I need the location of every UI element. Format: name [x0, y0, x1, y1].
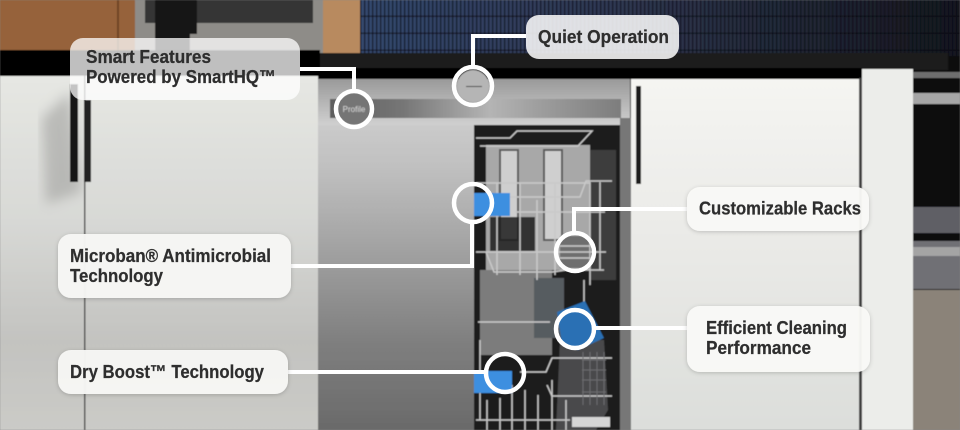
control bar: [330, 99, 621, 118]
dishwasher interior: [474, 125, 620, 430]
callout: microban: Technology: [70, 265, 164, 286]
handle shadow: [42, 92, 82, 204]
oven at right: [913, 72, 960, 290]
callout: efficient cleaning: Performance: [706, 337, 811, 358]
hotspot: efficient cleaning: [556, 310, 594, 348]
callout: smart features: Powered by SmartHQ™: [86, 66, 276, 87]
hotspot: microban: [454, 184, 492, 222]
line: customizable racks: [574, 209, 687, 232]
right side panel: [862, 69, 913, 430]
hotspot circles: [336, 67, 594, 392]
left cabinet handle: [70, 84, 91, 182]
wood cabinet left: [0, 0, 135, 52]
right side seam: [859, 78, 862, 430]
line: efficient cleaning: [595, 326, 687, 330]
racks: [476, 131, 612, 430]
hotspot: smart features: [336, 91, 372, 127]
blue part: wash module: [557, 301, 604, 350]
callout: quiet operation: Quiet Operation: [538, 26, 669, 47]
hotspot: dry boost: [486, 354, 524, 392]
floor: [911, 290, 960, 430]
quiet icon: [457, 70, 489, 102]
cabinet seam: [84, 76, 86, 430]
dishwasher door steel: [318, 79, 475, 430]
callout: customizable racks: [687, 187, 869, 231]
blue part: Microban dispenser: [474, 193, 510, 216]
callout: efficient cleaning: Efficient Cleaning: [706, 317, 847, 338]
connector lines: [288, 36, 687, 372]
callout: microban: Microban® Antimicrobial: [70, 245, 271, 266]
door frame right edge: [620, 118, 631, 430]
line: quiet operation: [473, 36, 526, 66]
hotspot: quiet operation: [454, 67, 492, 105]
callout: smart features: Smart Features: [86, 46, 211, 67]
callout: customizable racks: Customizable Racks: [699, 198, 861, 218]
line: dry boost: [288, 370, 486, 374]
callout: dry boost: Dry Boost™ Technology: [70, 361, 265, 382]
callout: smart features: [70, 38, 300, 100]
profile badge: [338, 93, 370, 125]
callout: quiet operation: [526, 15, 679, 59]
window and faucet: [135, 0, 323, 53]
wood cabinet right: [323, 0, 361, 53]
hotspot: racks: [556, 233, 594, 271]
right door handle: [636, 86, 641, 184]
profile badge: Profile: [343, 105, 366, 114]
left cabinet door: [0, 76, 318, 430]
line: smart features: [300, 69, 354, 91]
tile backsplash: [360, 0, 960, 56]
blue part: Dry Boost vent: [474, 371, 512, 393]
lower grid: [582, 352, 606, 405]
callout: efficient cleaning: [687, 306, 870, 372]
dishwasher top panel: [318, 79, 630, 125]
callout: dry boost: [58, 350, 288, 394]
line: microban: [291, 222, 472, 266]
right cabinet door: [631, 79, 860, 430]
callout: microban: [58, 234, 291, 298]
countertop: [0, 50, 948, 79]
